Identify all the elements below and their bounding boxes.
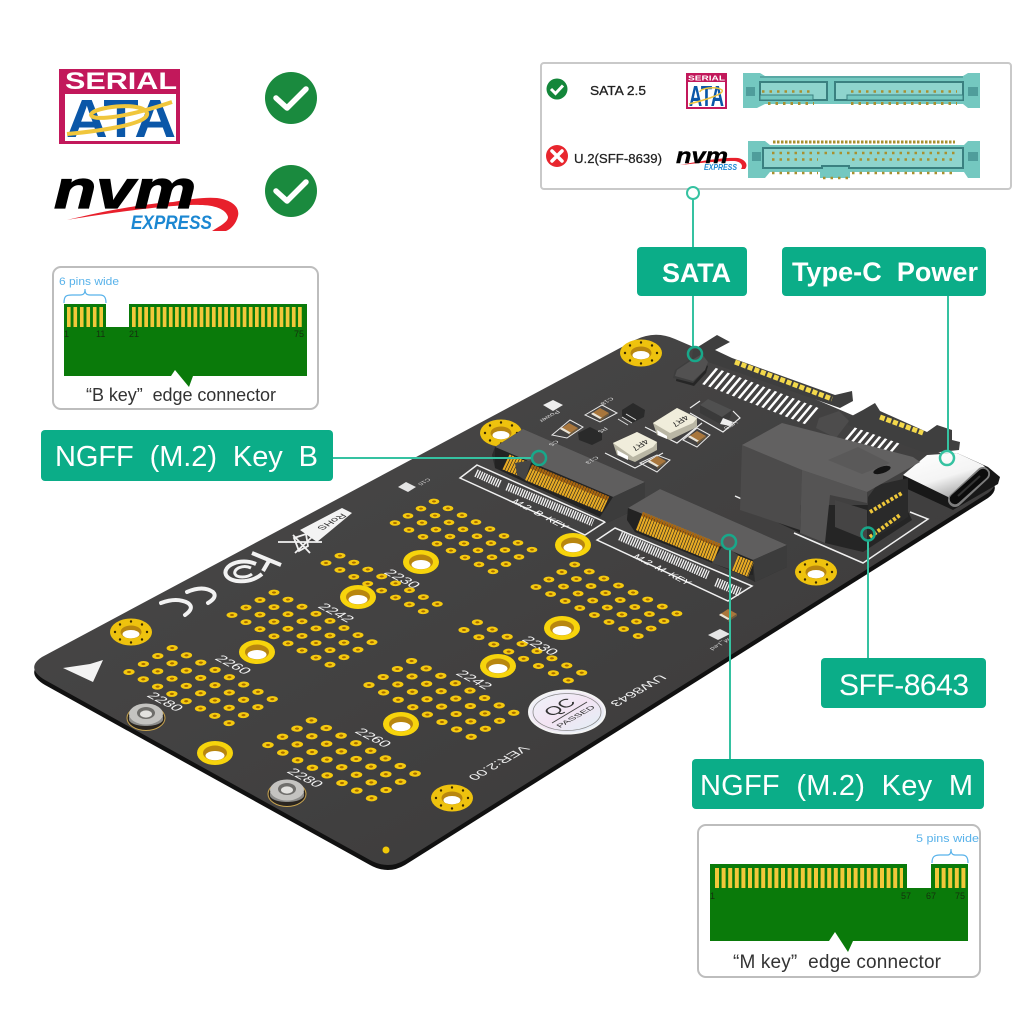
pad grid: 2242 right	[369, 661, 514, 737]
pad grid: 2260 right	[268, 720, 415, 798]
size labels: 2230	[518, 634, 561, 658]
pin numbers	[64, 329, 304, 339]
size labels: 2242	[452, 668, 495, 692]
panel: supported connector comparison: U.2(SFF-8639)	[574, 151, 662, 166]
text: VER:2.00: VER:2.00	[464, 744, 532, 782]
label: RoHS	[300, 508, 352, 542]
pad grid: top left	[395, 501, 532, 571]
pad grid: 2230 right	[464, 622, 582, 680]
pin numbers: 57	[901, 891, 911, 901]
logo: NVM Express: nvm	[54, 160, 196, 220]
panel: M key edge connector: “M key” edge connector	[733, 952, 942, 973]
QC passed sticker: QC	[539, 695, 580, 719]
5 pins wide label	[916, 833, 979, 863]
gold pins	[67, 307, 303, 327]
pcb underside edge	[34, 340, 995, 870]
LED: M key: M_Led	[707, 637, 732, 651]
connector: SFF-8643	[740, 423, 920, 552]
callout: NGFF Key B	[41, 430, 546, 481]
size labels: 2260	[351, 726, 394, 750]
middle face	[800, 470, 867, 543]
6 pins wide label: 6 pins wide	[59, 276, 119, 288]
logo: Serial ATA: ATA	[66, 89, 176, 149]
component labels: C5	[546, 439, 560, 447]
panel: B key edge connector	[53, 267, 318, 409]
pin numbers: 67	[926, 891, 936, 901]
LED: Power	[536, 400, 563, 423]
component labels: VR5	[721, 420, 739, 430]
components: regulators and capacitors	[552, 399, 740, 622]
component labels: C18	[598, 396, 615, 406]
pcb edge shape	[710, 864, 968, 952]
mini logo Serial ATA: ATA	[689, 81, 724, 113]
components: inductor 4R7 upper	[645, 408, 702, 443]
panel: B key edge connector: “B key” edge connector	[86, 385, 276, 405]
mini logo Serial ATA: SERIAL	[688, 74, 726, 82]
callout: Type-C Power	[782, 247, 986, 465]
LED: B key	[398, 477, 431, 492]
panel: supported connector comparison: SATA 2.5	[590, 83, 646, 98]
silkscreen: M.2 B KEY: M.2 B KEY	[509, 498, 571, 531]
icon: crossed bin	[278, 534, 322, 553]
connector diagram SATA	[743, 73, 980, 108]
gold mount rings	[110, 340, 837, 812]
LED: Power: Power	[536, 409, 561, 423]
panel: supported connector comparison	[541, 63, 1011, 189]
QC passed sticker: PASSED	[554, 704, 598, 729]
components: inductor 4R7 upper: 4R7	[669, 414, 691, 428]
plain mounting holes	[197, 533, 591, 765]
pin numbers: 11	[96, 329, 105, 339]
icon: CE mark	[161, 588, 215, 615]
callout: NGFF Key M	[692, 535, 984, 809]
icon: FC mark	[225, 553, 281, 581]
callout: SATA: SATA	[662, 258, 731, 288]
callout: SATA	[637, 187, 747, 361]
component labels: C13	[583, 455, 600, 465]
size labels: 2280	[283, 766, 326, 790]
top panel node	[687, 187, 699, 199]
small fiducial	[382, 846, 390, 854]
icon: U.2 cross	[546, 145, 568, 167]
icon: Serial ATA supported check	[265, 72, 317, 124]
connector: SATA data	[673, 335, 853, 416]
LED: B key: C15	[415, 477, 431, 486]
components: inductor 4R7 lower: 4R7	[629, 438, 651, 452]
logo: NVM Express: EXPRESS	[131, 213, 212, 234]
silkscreen: M.2 M KEY	[597, 528, 752, 601]
logo: Serial ATA: SERIAL	[65, 68, 177, 95]
components: inductor 4R7 lower	[605, 432, 663, 468]
mini logo NVM Express: EXPRESS	[704, 163, 738, 172]
icon: ESD triangle	[63, 660, 103, 682]
silkscreen: M.2 B KEY	[460, 465, 605, 535]
size labels: 2230	[380, 567, 423, 591]
mini logo Serial ATA	[686, 73, 727, 113]
connector diagram U.2	[748, 141, 980, 178]
component labels: R5	[595, 426, 609, 434]
6 pins wide label	[59, 276, 119, 303]
text: UW8643: UW8643	[607, 673, 669, 708]
pin numbers: 1	[64, 329, 69, 339]
5 pins wide label: 5 pins wide	[916, 833, 979, 845]
silkscreen: SFF-8643 footprint	[735, 496, 928, 563]
size labels: 2280	[143, 690, 186, 714]
pin numbers: 1	[710, 891, 715, 901]
pcb top surface	[34, 335, 995, 865]
front opening	[867, 478, 908, 543]
callout: Type-C Power: Type-C Power	[792, 257, 978, 287]
gold pins	[715, 868, 967, 888]
connector: M.2 Key M slot	[627, 489, 787, 582]
pad grid: 2260 left	[129, 648, 272, 723]
LED: M key	[707, 629, 732, 651]
callout: SFF-8643	[821, 528, 986, 708]
pin numbers	[710, 891, 965, 901]
callout: NGFF Key M: NGFF (M.2) Key M	[700, 770, 973, 802]
silkscreen: M.2 M KEY: M.2 M KEY	[630, 553, 693, 587]
callout: NGFF Key B: NGFF (M.2) Key B	[55, 441, 318, 473]
panel: M key edge connector	[698, 825, 980, 977]
silver standoffs	[127, 704, 306, 806]
logo: NVM Express	[54, 160, 238, 234]
pin numbers: 75	[294, 329, 304, 339]
label: RoHS: RoHS	[314, 512, 348, 531]
mini logo NVM Express: nvm	[676, 145, 728, 168]
left face	[740, 445, 802, 530]
pin numbers: 75	[955, 891, 965, 901]
pin numbers: 21	[129, 329, 139, 339]
pcb edge shape	[64, 304, 307, 387]
size labels: 2242	[314, 601, 357, 625]
size labels: 2260	[211, 653, 254, 677]
icon: SATA check	[546, 78, 568, 100]
component labels	[546, 396, 739, 465]
connector: USB Type-C	[903, 453, 1000, 510]
mini logo NVM Express	[676, 145, 747, 172]
top face	[742, 423, 920, 492]
icon: NVM Express supported check	[265, 165, 317, 217]
pad grid: top right	[536, 564, 677, 636]
QC passed sticker	[529, 690, 605, 734]
pad grid: 2230 left	[326, 556, 437, 611]
connector node	[688, 347, 702, 361]
board: PCB adapter	[34, 335, 1000, 870]
pad grid: 2242 left	[232, 592, 372, 665]
lower plug	[835, 500, 867, 540]
callout: SFF-8643: SFF-8643	[839, 669, 969, 702]
connector: M.2 Key B slot	[492, 429, 645, 523]
logo: Serial ATA	[59, 68, 180, 149]
connector: SATA power	[816, 403, 960, 452]
size labels	[143, 567, 561, 790]
